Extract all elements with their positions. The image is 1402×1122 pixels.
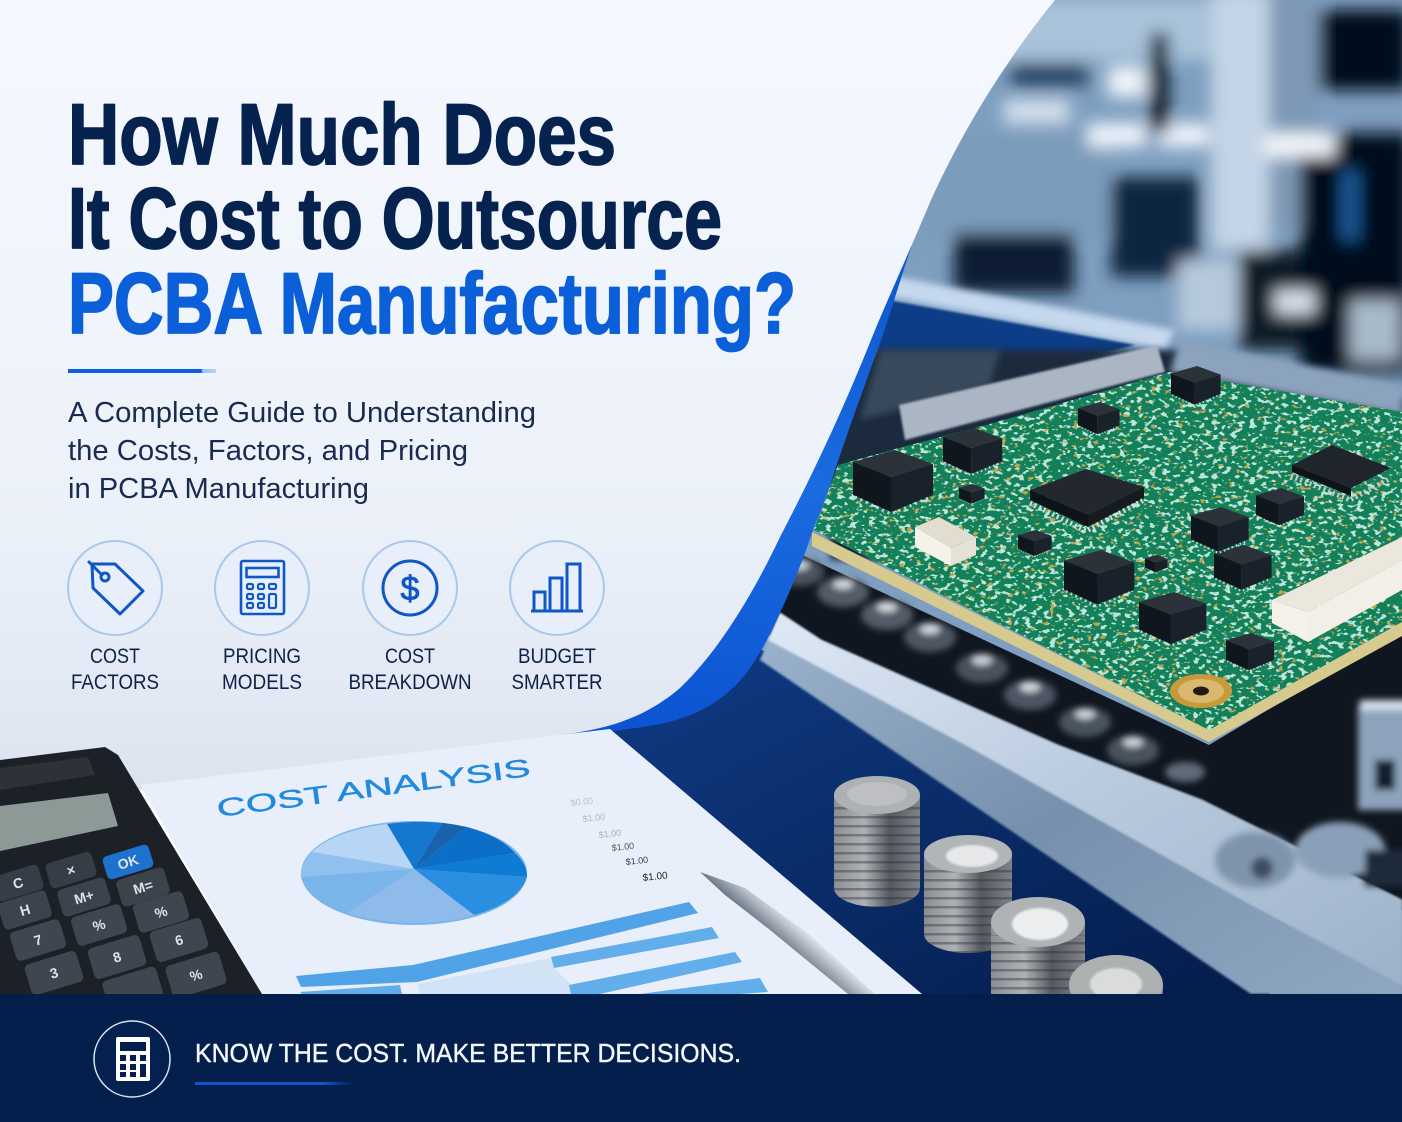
calculator keys: × — [65, 861, 77, 879]
label — [348, 645, 472, 694]
icon: dollar coin — [363, 541, 457, 635]
calculator keys: OK — [116, 851, 140, 873]
pie chart — [301, 821, 527, 925]
feature: pricing models — [215, 541, 309, 694]
subtitle: A Complete Guide to Understanding — [68, 397, 536, 429]
background: blurred assembly line machinery — [560, 0, 1402, 994]
icon: price tag — [68, 541, 162, 635]
calculator keys: 3 — [48, 964, 60, 982]
feature: budget smarter — [510, 541, 604, 694]
calculator keys: 7 — [32, 931, 44, 949]
icon: calculator — [215, 541, 309, 635]
calculator keys: C — [11, 874, 25, 892]
metal rail — [760, 613, 1402, 994]
pen — [700, 872, 875, 994]
coin stack 1 — [834, 776, 920, 907]
price column: $1.00 — [625, 855, 649, 867]
paper heading: COST ANALYSIS — [215, 754, 532, 823]
label: BREAKDOWN — [348, 671, 472, 694]
coin stack 4 — [1069, 955, 1163, 1015]
calculator screen — [0, 793, 118, 851]
price column: $1.00 — [582, 812, 606, 824]
label — [222, 645, 302, 694]
feature: cost breakdown — [348, 541, 472, 694]
title: PCBA Manufacturing? — [68, 256, 796, 352]
tagline underline — [195, 1082, 355, 1085]
calculator keys: H — [18, 901, 32, 919]
tagline: KNOW THE COST. MAKE BETTER DECISIONS. — [195, 1038, 741, 1068]
white connectors — [915, 517, 1402, 642]
icon: calculator badge — [94, 1021, 170, 1097]
chips — [853, 366, 1304, 671]
label: BUDGET — [518, 645, 596, 668]
label: PRICING — [223, 645, 301, 668]
calculator keys: % — [153, 902, 170, 921]
under-board components and shadow — [770, 540, 1402, 910]
coin stack 3 — [991, 897, 1085, 1000]
calculator keys: % — [91, 915, 108, 934]
title: How Much Does — [68, 87, 616, 183]
gold mounting hole — [1170, 674, 1232, 708]
calculator keys: M+ — [72, 886, 96, 908]
subtitle: the Costs, Factors, and Pricing — [68, 435, 468, 467]
calculator keys: M= — [131, 876, 155, 898]
table bars — [296, 902, 768, 994]
calculator keys: 6 — [173, 931, 185, 949]
white left panel — [0, 0, 1055, 790]
QFP processor chips — [1030, 445, 1391, 531]
label: SMARTER — [512, 671, 602, 694]
title: It Cost to Outsource — [68, 171, 722, 267]
price column: $1.00 — [611, 841, 635, 853]
subtitle: in PCBA Manufacturing — [68, 473, 369, 505]
label — [512, 645, 602, 694]
feature: cost factors — [68, 541, 162, 694]
label: COST — [385, 645, 435, 668]
circuit board — [800, 360, 1402, 742]
icon: dollar coin: $ — [401, 570, 420, 608]
blue curved ribbon — [570, 245, 912, 735]
blue table surface — [600, 640, 1270, 994]
calculator — [0, 747, 262, 1014]
footer bar — [0, 994, 1402, 1122]
label: FACTORS — [71, 671, 159, 694]
calculator keys: 8 — [111, 948, 123, 966]
label: MODELS — [222, 671, 302, 694]
price column — [570, 796, 669, 884]
icon: bar chart — [510, 541, 604, 635]
cost analysis paper — [140, 729, 922, 994]
silver beam behind circuit board — [899, 345, 1165, 440]
price column: $1.00 — [598, 828, 622, 840]
coin stack 2 — [924, 835, 1012, 953]
coin stacks — [834, 776, 1163, 1015]
calculator keys — [0, 844, 228, 1014]
label: COST — [90, 645, 140, 668]
accent rule — [68, 369, 216, 373]
label — [71, 645, 159, 694]
calculator keys: % — [188, 965, 205, 984]
subtitle — [68, 397, 536, 505]
price column: $0.00 — [570, 796, 594, 808]
title — [68, 87, 796, 352]
price column: $1.00 — [642, 870, 669, 884]
